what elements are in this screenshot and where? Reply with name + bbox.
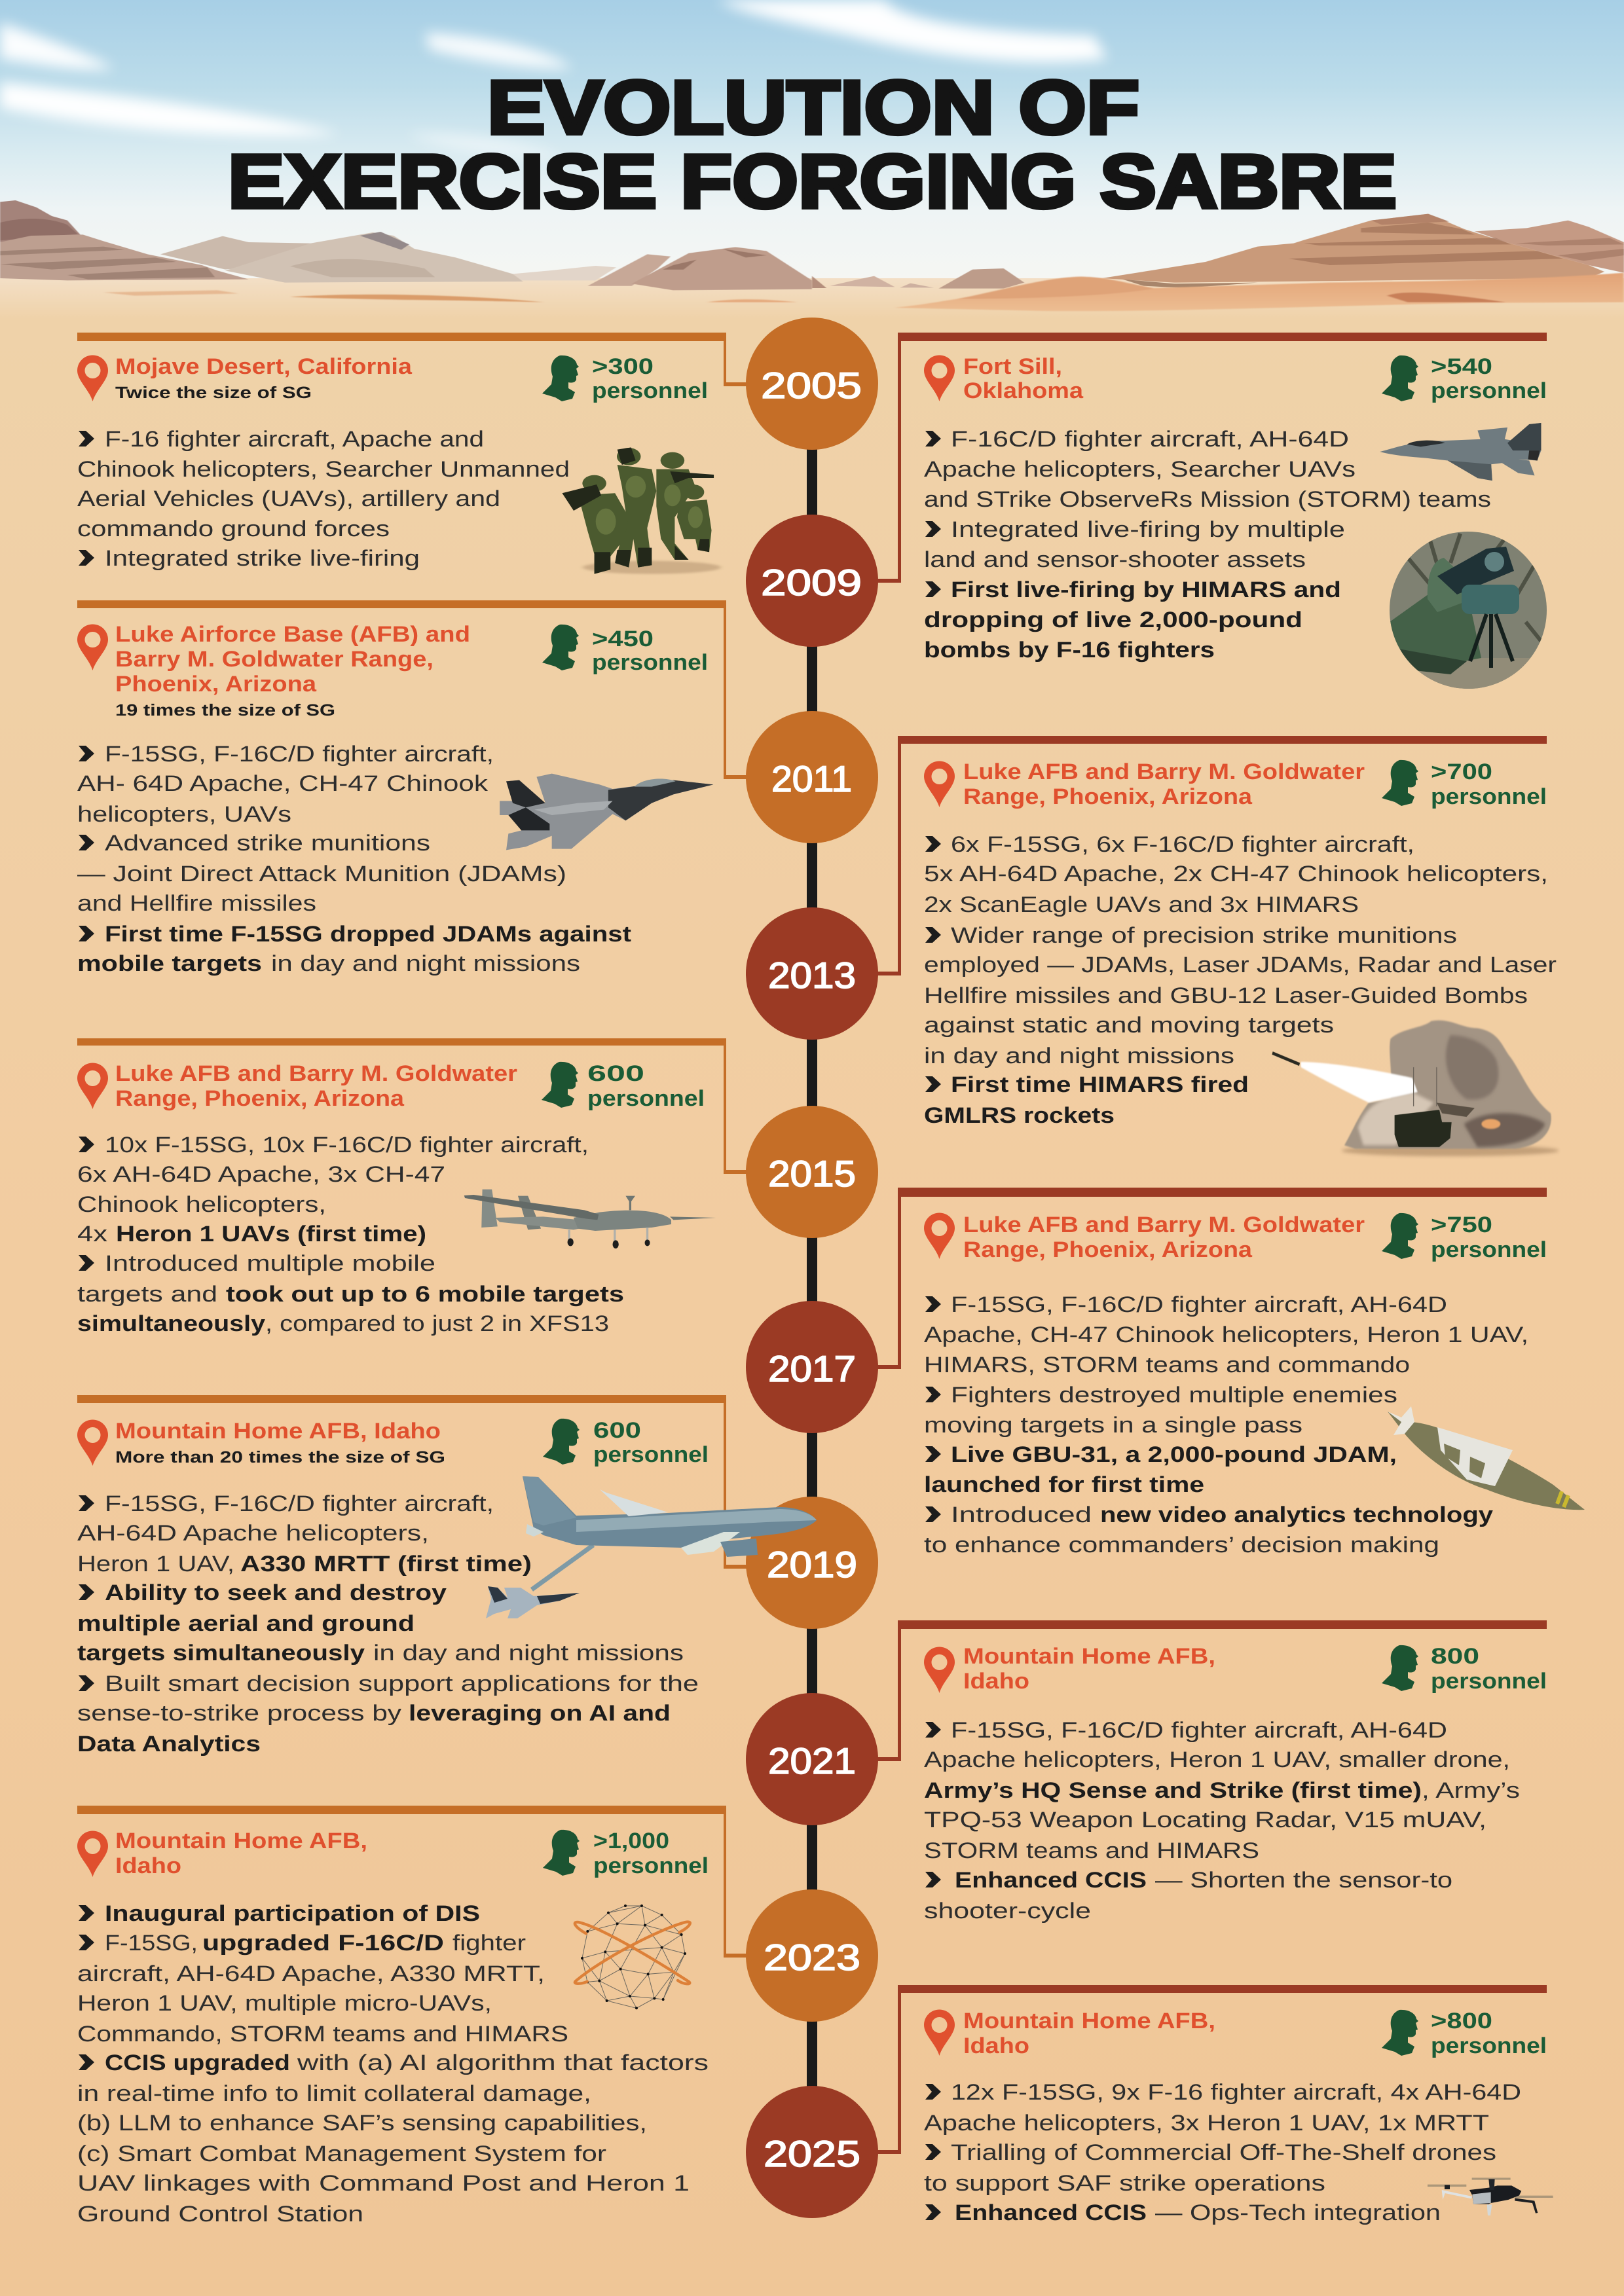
body text: STORM teams and HIMARS xyxy=(924,1838,1259,1863)
personnel count: personnel xyxy=(1431,2033,1547,2058)
icon: soldier silhouette xyxy=(1382,1213,1418,1259)
body text: CCIS upgraded xyxy=(105,2050,290,2075)
body text xyxy=(924,1292,1528,1558)
body text: moving targets in a single pass xyxy=(924,1413,1302,1438)
personnel count: >800 xyxy=(1431,2009,1492,2033)
personnel count: personnel xyxy=(592,378,708,403)
personnel count: personnel xyxy=(1431,1669,1547,1694)
body text: in day and night missions xyxy=(924,1044,1234,1068)
personnel count xyxy=(1431,759,1547,809)
location heading xyxy=(963,759,1365,809)
panel: 2011 Luke Airforce Base xyxy=(77,600,747,976)
body text: shooter-cycle xyxy=(924,1899,1091,1923)
year marker 2019 xyxy=(746,1497,878,1629)
background: mountains and dunes xyxy=(0,200,1624,311)
location heading: Luke AFB and Barry M. Goldwater xyxy=(963,759,1365,784)
body text: targets and xyxy=(77,1282,217,1307)
location heading: Range, Phoenix, Arizona xyxy=(115,1086,405,1111)
body text: Apache helicopters, Searcher UAVs xyxy=(924,457,1356,482)
location heading: Range, Phoenix, Arizona xyxy=(963,1237,1253,1262)
panel: 2017 Luke AFB and Goldwater Range xyxy=(877,1188,1585,1558)
body text: First time HIMARS fired xyxy=(951,1072,1249,1097)
location heading: More than 20 times the size of SG xyxy=(115,1448,445,1467)
location heading xyxy=(963,1644,1215,1694)
body text xyxy=(77,1901,709,2227)
icon: location pin xyxy=(77,355,108,401)
body text: to enhance commanders’ decision making xyxy=(924,1533,1439,1558)
icon: soldier silhouette xyxy=(1382,355,1418,401)
body text: 2x ScanEagle UAVs and 3x HIMARS xyxy=(924,892,1359,917)
body text xyxy=(924,1718,1520,1923)
body text: Integrated strike live-firing xyxy=(105,546,420,571)
personnel count xyxy=(592,354,708,403)
body text: Integrated live-firing by multiple xyxy=(951,517,1345,542)
body text: and Hellfire missiles xyxy=(77,891,316,916)
panel: 2015 Luke AFB and Goldwater Range xyxy=(77,1038,747,1336)
personnel count: >750 xyxy=(1431,1212,1492,1237)
image: soldiers xyxy=(562,447,721,574)
image: drone xyxy=(1428,2179,1553,2215)
body text: bombs by F-16 fighters xyxy=(924,638,1215,663)
year marker 2021 xyxy=(746,1693,878,1825)
body text: 6x F-15SG, 6x F-16C/D fighter aircraft, xyxy=(951,832,1414,857)
location heading: Mountain Home AFB, xyxy=(963,1644,1215,1669)
personnel count: personnel xyxy=(592,650,708,675)
icon: AI network globe xyxy=(575,1904,690,2009)
body text: Data Analytics xyxy=(77,1732,261,1757)
title xyxy=(228,65,1397,224)
year marker 2005 xyxy=(746,318,878,450)
body text xyxy=(77,742,631,976)
personnel count xyxy=(1431,354,1547,403)
location heading: Mountain Home AFB, xyxy=(115,1829,367,1853)
personnel count: 600 xyxy=(593,1418,641,1443)
body text: sense-to-strike process by xyxy=(77,1701,401,1726)
year marker 2009: 2009 xyxy=(761,562,862,603)
body text: leveraging on AI and xyxy=(409,1701,671,1726)
year marker 2017 xyxy=(746,1301,878,1433)
panel: 2013 Luke AFB and Goldwater Range xyxy=(877,736,1559,1156)
image: A330 MRTT tanker refuelling F-15 xyxy=(486,1476,817,1618)
body text: , compared to just 2 in XFS13 xyxy=(265,1311,609,1336)
body text: in real-time info to limit collateral damage, xyxy=(77,2081,591,2106)
personnel count: personnel xyxy=(1431,784,1547,809)
location heading: Twice the size of SG xyxy=(115,384,312,402)
body text: 5x AH-64D Apache, 2x CH-47 Chinook helicopters, xyxy=(924,862,1548,886)
image: F-15 fighter xyxy=(500,774,713,850)
body text: F-15SG, F-16C/D fighter aircraft, xyxy=(105,1491,494,1516)
body text: Hellfire missiles and GBU-12 Laser-Guided Bombs xyxy=(924,983,1528,1008)
personnel count xyxy=(593,1418,709,1467)
location heading xyxy=(963,354,1084,403)
body text: — Shorten the sensor-to xyxy=(1155,1868,1452,1893)
body text: Ability to seek and destroy xyxy=(105,1580,447,1605)
body text: multiple aerial and ground xyxy=(77,1611,415,1636)
year marker 2025: 2025 xyxy=(764,2133,860,2174)
year marker 2011 xyxy=(746,711,878,843)
location heading: 19 times the size of SG xyxy=(115,701,335,720)
body text: to support SAF strike operations xyxy=(924,2171,1325,2196)
body text: Chinook helicopters, Searcher Unmanned xyxy=(77,457,570,482)
location heading: Luke AFB and Barry M. Goldwater xyxy=(963,1212,1365,1237)
personnel count: >540 xyxy=(1431,354,1492,379)
body text: First time F-15SG dropped JDAMs against xyxy=(105,922,631,947)
body text: (b) LLM to enhance SAF’s sensing capabilities, xyxy=(77,2111,647,2136)
icon: location pin xyxy=(924,761,955,807)
body text: launched for first time xyxy=(924,1472,1204,1497)
icon: location pin xyxy=(924,1213,955,1259)
body text: new video analytics technology xyxy=(1100,1503,1493,1527)
icon: soldier silhouette xyxy=(542,625,579,670)
location heading xyxy=(115,354,413,402)
year marker 2021: 2021 xyxy=(768,1740,856,1781)
location heading: Idaho xyxy=(963,1669,1029,1694)
location heading xyxy=(963,2009,1215,2058)
body text: — Joint Direct Attack Munition (JDAMs) xyxy=(77,862,566,886)
personnel count: personnel xyxy=(1431,1237,1547,1262)
location heading: Barry M. Goldwater Range, xyxy=(115,647,434,672)
body text: in day and night missions xyxy=(271,951,580,976)
icon: soldier silhouette xyxy=(542,1062,578,1108)
body text: 12x F-15SG, 9x F-16 fighter aircraft, 4x AH-64D xyxy=(951,2080,1521,2105)
location heading xyxy=(115,1061,517,1111)
icon: soldier silhouette xyxy=(543,1830,580,1876)
icon: location pin xyxy=(77,1063,108,1109)
year marker 2011: 2011 xyxy=(771,758,852,799)
body text: F-15SG, F-16C/D fighter aircraft, AH-64D xyxy=(951,1292,1447,1317)
image: Heron 1 UAV xyxy=(464,1190,716,1248)
body text: Apache helicopters, 3x Heron 1 UAV, 1x MRTT xyxy=(924,2111,1489,2136)
icon: location pin xyxy=(924,2010,955,2056)
body text: First live-firing by HIMARS and xyxy=(951,577,1341,602)
image: GBU-31 JDAM bomb xyxy=(1388,1406,1585,1510)
panel: 2019 Mountain Home AFB xyxy=(77,1395,817,1757)
personnel count xyxy=(587,1061,705,1111)
body text xyxy=(924,832,1557,1128)
body text: Heron 1 UAV, xyxy=(77,1552,234,1576)
icon: location pin xyxy=(77,625,108,670)
body text: targets simultaneously xyxy=(77,1641,365,1666)
panel: 2009 Fort Sill xyxy=(877,333,1547,691)
personnel count: >700 xyxy=(1431,759,1492,784)
body text: and STrike ObserveRs Mission (STORM) teams xyxy=(924,487,1491,512)
panel: 2021 Mountain Home AFB xyxy=(877,1620,1547,1923)
body text: TPQ-53 Weapon Locating Radar, V15 mUAV, xyxy=(924,1808,1486,1832)
icon: soldier silhouette xyxy=(1382,2010,1418,2056)
personnel count: >1,000 xyxy=(593,1829,669,1853)
personnel count: >300 xyxy=(592,354,654,379)
year marker 2023 xyxy=(746,1889,878,2022)
year marker 2015 xyxy=(746,1106,878,1238)
body text: Live GBU-31, a 2,000-pound JDAM, xyxy=(951,1442,1397,1467)
icon: location pin xyxy=(924,1647,955,1693)
year marker 2023: 2023 xyxy=(764,1937,860,1978)
year marker 2005: 2005 xyxy=(761,365,862,406)
image: soldier with targeting scope xyxy=(1390,532,1547,691)
personnel count xyxy=(592,627,708,675)
year marker 2019: 2019 xyxy=(767,1544,857,1585)
body text: A330 MRTT (first time) xyxy=(240,1552,532,1576)
body text: dropping of live 2,000-pound xyxy=(924,608,1302,632)
year marker 2009 xyxy=(746,515,878,647)
body text: GMLRS rockets xyxy=(924,1103,1115,1128)
body text: helicopters, UAVs xyxy=(77,802,291,827)
body text: against static and moving targets xyxy=(924,1013,1334,1038)
year marker 2017: 2017 xyxy=(768,1348,856,1389)
title: EXERCISE FORGING SABRE xyxy=(228,139,1397,224)
title: EVOLUTION OF xyxy=(487,65,1139,150)
body text: UAV linkages with Command Post and Heron 1 xyxy=(77,2171,690,2196)
body text: F-15SG, F-16C/D fighter aircraft, xyxy=(105,742,494,767)
body text: 4x xyxy=(77,1222,107,1247)
body text xyxy=(924,427,1491,663)
icon: soldier silhouette xyxy=(1382,760,1418,806)
body text: commando ground forces xyxy=(77,517,390,541)
location heading: Fort Sill, xyxy=(963,354,1062,379)
personnel count: 600 xyxy=(587,1061,644,1086)
location heading: Oklahoma xyxy=(963,378,1084,403)
image: F-16 fighter xyxy=(1380,423,1541,481)
body text: Inaugural participation of DIS xyxy=(105,1901,480,1926)
body text: aircraft, AH-64D Apache, A330 MRTT, xyxy=(77,1961,545,1986)
personnel count: personnel xyxy=(587,1086,705,1111)
body text: Built smart decision support applications for the xyxy=(105,1671,699,1696)
body text: 6x AH-64D Apache, 3x CH-47 xyxy=(77,1162,445,1187)
body text: took out up to 6 mobile targets xyxy=(226,1282,624,1307)
body text xyxy=(924,2080,1521,2225)
body text xyxy=(77,427,570,571)
body text: Trialling of Commercial Off-The-Shelf drones xyxy=(951,2140,1496,2165)
body text: upgraded F-16C/D xyxy=(202,1931,444,1956)
body text: Commando, STORM teams and HIMARS xyxy=(77,2022,568,2047)
icon: location pin xyxy=(77,1831,108,1877)
body text: Fighters destroyed multiple enemies xyxy=(951,1383,1397,1408)
body text: Introduced multiple mobile xyxy=(105,1251,435,1276)
personnel count xyxy=(1431,1212,1547,1262)
body text: Army’s HQ Sense and Strike (first time) xyxy=(924,1778,1422,1803)
location heading: Luke Airforce Base (AFB) and xyxy=(115,622,470,647)
body text: F-16 fighter aircraft, Apache and xyxy=(105,427,484,452)
icon: soldier silhouette xyxy=(543,1419,580,1465)
location heading: Idaho xyxy=(115,1853,181,1878)
body text xyxy=(77,1133,624,1336)
body text: Enhanced CCIS xyxy=(955,2200,1147,2225)
personnel count: personnel xyxy=(593,1442,709,1467)
body text: Enhanced CCIS xyxy=(955,1868,1147,1893)
body text: F-15SG, F-16C/D fighter aircraft, AH-64D xyxy=(951,1718,1447,1743)
icon: soldier silhouette xyxy=(542,355,579,401)
body text: AH-64D Apache helicopters, xyxy=(77,1521,429,1546)
location heading: Idaho xyxy=(963,2033,1029,2058)
image: HIMARS launch xyxy=(1272,1021,1559,1156)
location heading: Range, Phoenix, Arizona xyxy=(963,784,1253,809)
year marker 2013: 2013 xyxy=(768,955,856,996)
year marker 2015: 2015 xyxy=(768,1153,856,1194)
personnel count xyxy=(1431,1644,1547,1694)
body text: HIMARS, STORM teams and commando xyxy=(924,1353,1410,1377)
panel: 2025 Mountain Home AFB xyxy=(877,1985,1553,2225)
personnel count: 800 xyxy=(1431,1644,1479,1669)
body text: mobile targets xyxy=(77,951,262,976)
personnel count xyxy=(1431,2009,1547,2058)
body text: Wider range of precision strike munitions xyxy=(951,923,1457,948)
personnel count: personnel xyxy=(1431,378,1547,403)
location heading: Mountain Home AFB, xyxy=(963,2009,1215,2033)
year marker 2013 xyxy=(746,907,878,1040)
icon: soldier silhouette xyxy=(1382,1645,1418,1691)
personnel count xyxy=(593,1829,709,1878)
body text: Heron 1 UAV, multiple micro-UAVs, xyxy=(77,1991,492,2016)
personnel count: personnel xyxy=(593,1853,709,1878)
body text: Chinook helicopters, xyxy=(77,1192,326,1217)
location heading: Phoenix, Arizona xyxy=(115,672,317,697)
icon: location pin xyxy=(77,1420,108,1466)
body text: Ground Control Station xyxy=(77,2202,363,2227)
body text: AH- 64D Apache, CH-47 Chinook xyxy=(77,771,489,796)
location heading: Mojave Desert, California xyxy=(115,354,413,379)
location heading xyxy=(963,1212,1365,1262)
body text: fighter xyxy=(452,1931,526,1956)
body text: F-15SG, xyxy=(105,1931,198,1956)
body text: land and sensor-shooter assets xyxy=(924,547,1306,572)
body text: Apache, CH-47 Chinook helicopters, Heron 1 UAV, xyxy=(924,1322,1528,1347)
body text: Advanced strike munitions xyxy=(105,831,430,856)
panel: 2005 Mojave Desert xyxy=(77,333,747,574)
location heading: Mountain Home AFB, Idaho xyxy=(115,1419,441,1444)
year marker 2025 xyxy=(746,2086,878,2218)
body text: — Ops-Tech integration xyxy=(1155,2200,1441,2225)
location heading xyxy=(115,1829,367,1878)
location heading: Luke AFB and Barry M. Goldwater xyxy=(115,1061,517,1086)
body text: 10x F-15SG, 10x F-16C/D fighter aircraft, xyxy=(105,1133,589,1157)
body text: with (a) AI algorithm that factors xyxy=(297,2050,709,2075)
personnel count: >450 xyxy=(592,627,654,651)
body text: Apache helicopters, Heron 1 UAV, smaller drone, xyxy=(924,1747,1510,1772)
location heading xyxy=(115,622,470,720)
location heading xyxy=(115,1419,445,1467)
body text: in day and night missions xyxy=(373,1641,684,1666)
body text: (c) Smart Combat Management System for xyxy=(77,2141,606,2166)
body text: Heron 1 UAVs (first time) xyxy=(116,1222,426,1247)
body text: Aerial Vehicles (UAVs), artillery and xyxy=(77,486,500,511)
body text xyxy=(77,1491,699,1757)
body text: Introduced xyxy=(951,1503,1092,1527)
icon: location pin xyxy=(924,355,955,401)
body text: , Army’s xyxy=(1422,1778,1520,1803)
panel: 2023 Mountain Home AFB xyxy=(77,1806,747,2227)
body text: simultaneously xyxy=(77,1311,265,1336)
timeline spine xyxy=(807,384,817,2152)
body text: employed — JDAMs, Laser JDAMs, Radar and Laser xyxy=(924,953,1557,977)
body text: F-16C/D fighter aircraft, AH-64D xyxy=(951,427,1349,452)
